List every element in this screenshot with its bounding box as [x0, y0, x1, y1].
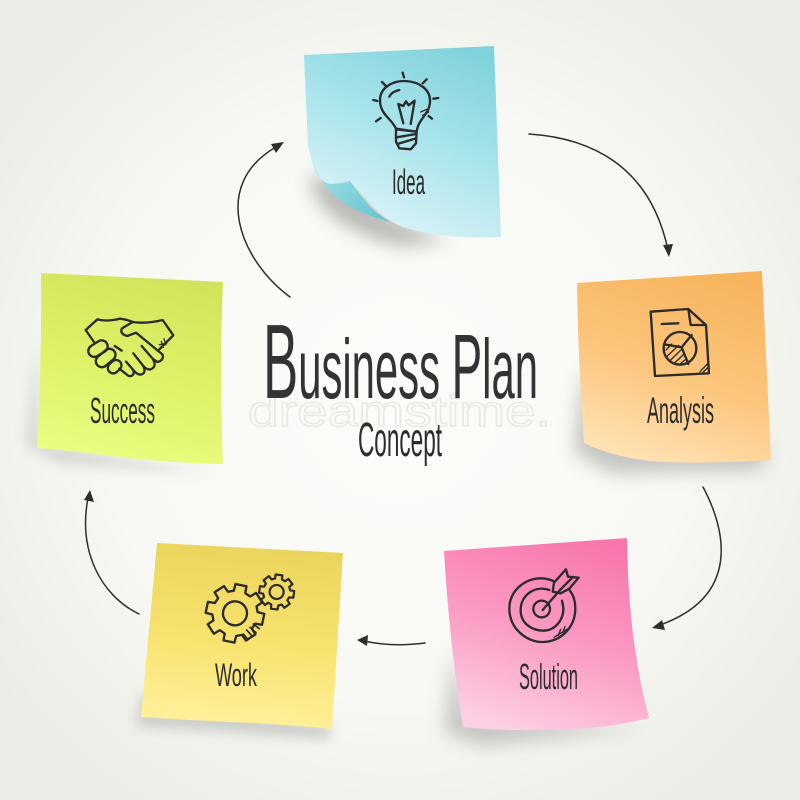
- shadow: [574, 370, 770, 474]
- icon: gears: [201, 572, 296, 647]
- panel: analysis note: Analysis: [647, 390, 714, 431]
- arrow: solution to work: [357, 635, 425, 646]
- arrow: work to success: [84, 490, 139, 614]
- arrow: analysis to solution: [652, 487, 721, 630]
- icon: target with arrow: [509, 569, 579, 642]
- note: solution: [444, 538, 649, 730]
- shadow: [444, 650, 640, 746]
- icon: document with pie chart: [651, 309, 709, 376]
- panel: idea note: Idea: [392, 163, 425, 202]
- shadow: [136, 695, 330, 740]
- arrow: success to idea: [238, 142, 290, 297]
- panel: solution note: Solution: [519, 656, 578, 697]
- page curl: [314, 168, 390, 222]
- large gear: [201, 579, 269, 647]
- panel: idea note: [304, 46, 501, 246]
- small gear: [257, 572, 296, 612]
- icon: handshake: [86, 319, 173, 376]
- panel: success note: Success: [90, 390, 155, 431]
- note: work: [141, 543, 343, 729]
- text: Concept: [358, 414, 442, 467]
- arrow: idea to analysis: [529, 134, 673, 257]
- shadow: [26, 340, 215, 474]
- gear hatching: [243, 624, 259, 639]
- note: success: [37, 273, 223, 464]
- panel: solution note: [444, 538, 649, 746]
- curl shadow: [310, 175, 450, 246]
- note: analysis: [577, 271, 771, 463]
- panel: success note: [26, 273, 223, 474]
- panel: work note: [136, 543, 343, 740]
- panel: analysis note: [574, 271, 771, 474]
- watermark: dreamstime.: [248, 387, 551, 436]
- icon: light bulb: [373, 73, 438, 149]
- title: Business Plan: [263, 303, 538, 421]
- note: idea: [304, 46, 501, 238]
- label: work: Work: [215, 657, 258, 693]
